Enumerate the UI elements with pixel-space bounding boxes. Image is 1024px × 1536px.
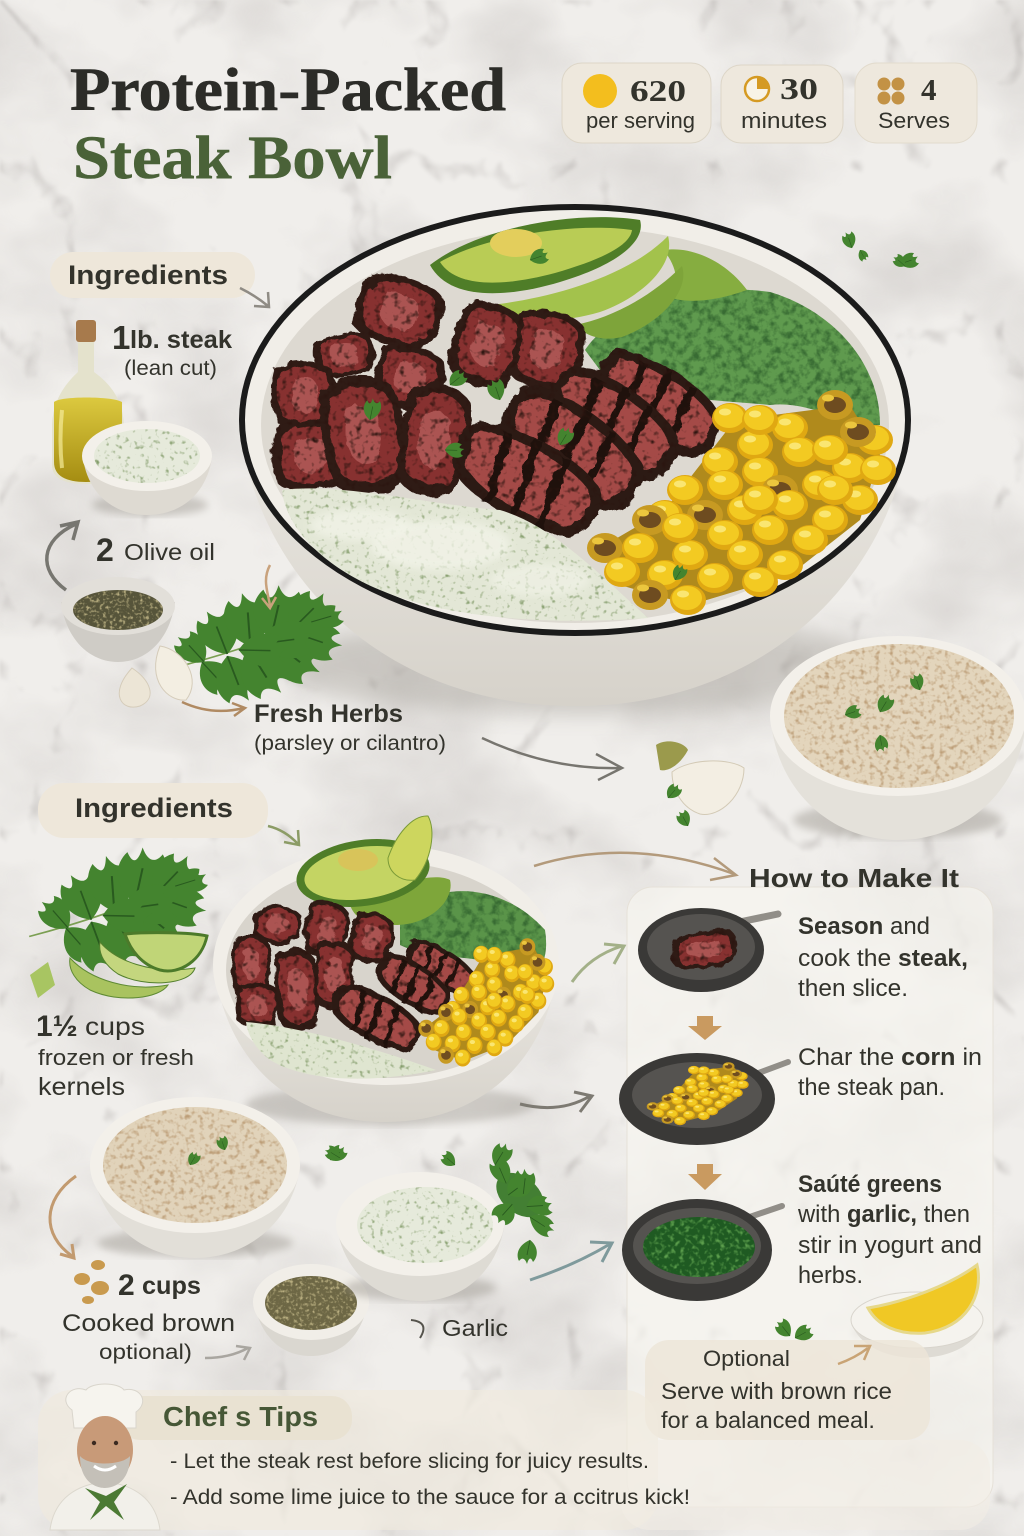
step 3 text: herbs.	[798, 1262, 863, 1289]
text: corn amount: frozen or fresh	[38, 1045, 194, 1070]
arrow: step 1 to 2	[688, 1016, 722, 1040]
ingredients heading 1: Ingredients	[68, 260, 228, 290]
step 3 text: Saúté greens	[798, 1171, 942, 1198]
step 3 pan	[622, 1199, 782, 1301]
herb sprig	[772, 1316, 816, 1346]
yogurt sauce bowl lower	[336, 1172, 504, 1301]
stat chip: calories: per serving	[586, 108, 695, 133]
arrows: around second bowl	[520, 944, 624, 1280]
icon: grains	[74, 1260, 109, 1304]
panel: how to make it	[619, 863, 993, 1507]
title	[70, 57, 506, 192]
ingredients heading 1	[50, 252, 255, 298]
parsley	[165, 584, 348, 710]
stat chip: serves	[855, 63, 977, 143]
arrow: to how to make it	[534, 853, 736, 880]
title: Steak Bowl	[73, 125, 392, 192]
ingredients heading 2	[38, 783, 268, 838]
panel: optional: Optional	[703, 1346, 790, 1371]
tip 2: - Add some lime juice to the sauce for a ccitrus kick!	[170, 1486, 690, 1509]
text: fresh herbs: Fresh Herbs	[254, 700, 403, 728]
text: steak amount: 1	[112, 319, 130, 356]
text: steak amount: lb. steak	[130, 326, 232, 354]
icon: olive oil bottle	[52, 320, 124, 484]
steak slices	[268, 267, 736, 552]
stat chip: time	[721, 65, 843, 143]
heading text: Chef s Tips	[163, 1401, 318, 1432]
stat chip: time: 30	[780, 71, 818, 106]
text: rice amount	[62, 1269, 235, 1364]
parsley and cucumber left	[29, 846, 212, 998]
sauce	[282, 488, 648, 621]
icon: yellow circle	[583, 74, 617, 108]
text: rice amount: optional)	[99, 1341, 192, 1364]
greens	[585, 289, 880, 425]
lemon dish	[851, 1265, 983, 1358]
panel: optional: for a balanced meal.	[661, 1407, 875, 1433]
step 2 text: Char the corn in	[798, 1044, 982, 1071]
text: steak amount	[112, 319, 232, 380]
text: corn amount: cups	[85, 1013, 145, 1041]
stat chip: calories	[562, 63, 711, 143]
arrow: small orange curve	[262, 565, 276, 608]
step 1 text	[798, 913, 968, 1002]
greens	[400, 891, 546, 972]
tip 1: - Let the steak rest before slicing for juicy results.	[170, 1450, 649, 1473]
spice bowl lower	[253, 1264, 369, 1356]
main steak bowl	[239, 204, 911, 715]
avocado slices	[430, 217, 747, 339]
text: olive oil amount: Olive oil	[124, 539, 215, 565]
text: olive oil amount	[96, 532, 215, 568]
chopped herbs	[323, 1140, 579, 1264]
brown rice bowl right	[770, 636, 1024, 840]
stat chip: time: minutes	[741, 108, 827, 133]
arrow: to lemon	[838, 1346, 870, 1364]
text: olive oil amount: 2	[96, 532, 114, 568]
icon: four dots	[878, 78, 904, 104]
arrow: small grey	[205, 1346, 250, 1360]
arrow: to small bowl	[268, 826, 299, 845]
garlic cloves	[119, 646, 192, 707]
arrow: to garlic	[482, 738, 622, 780]
text: corn amount	[36, 1010, 194, 1101]
herb garnish	[364, 246, 689, 583]
arrow: curved up	[47, 522, 78, 590]
step 1 pan	[638, 908, 778, 992]
step 3 text: stir in yogurt and	[798, 1232, 982, 1259]
steak slices	[232, 898, 483, 1060]
arrow: curved orange	[50, 1176, 76, 1258]
text: rice amount: cups	[142, 1272, 201, 1300]
text: rice amount: 2	[118, 1269, 135, 1302]
arrow: to bowl	[240, 288, 269, 307]
text: steak amount: (lean cut)	[124, 357, 217, 380]
avocado	[292, 816, 451, 925]
heading pill	[120, 1396, 352, 1440]
step 2 text	[798, 1044, 982, 1101]
stat chip: calories: 620	[630, 73, 686, 108]
title: Protein-Packed	[70, 57, 506, 124]
arrow: step 2 to 3	[688, 1164, 722, 1190]
text: fresh herbs	[254, 700, 446, 755]
ingredients heading 2: Ingredients	[75, 793, 233, 823]
arrow: to fresh herbs	[182, 702, 245, 716]
step 1 text: cook the steak,	[798, 945, 968, 972]
step 3 text: with garlic, then	[797, 1201, 970, 1228]
text: corn amount: kernels	[38, 1073, 125, 1101]
step 1 text: then slice.	[798, 975, 908, 1002]
icon: clock	[745, 77, 769, 101]
brown rice bowl lower	[90, 1097, 300, 1258]
garlic clove and olive right	[656, 741, 744, 829]
step 1 text: Season and	[798, 913, 930, 940]
corn	[418, 938, 554, 1067]
spice bowl	[61, 577, 175, 662]
small sauce bowl	[82, 421, 212, 516]
chef portrait	[50, 1384, 160, 1530]
text: garlic: Garlic	[442, 1315, 508, 1341]
step 2 pan	[619, 1053, 788, 1145]
scattered herbs top right	[839, 229, 922, 273]
step 3 text	[797, 1171, 982, 1289]
text: garlic	[411, 1315, 508, 1341]
step 2 text: the steak pan.	[798, 1074, 945, 1101]
text: fresh herbs: (parsley or cilantro)	[254, 732, 446, 755]
panel: chef's tips	[38, 1384, 990, 1530]
second steak bowl	[213, 816, 559, 1125]
panel: optional	[645, 1340, 930, 1440]
stat chip: serves: 4	[921, 72, 936, 107]
panel: optional: Serve with brown rice	[661, 1378, 892, 1404]
heading: How to Make It	[749, 863, 959, 893]
text: rice amount: Cooked brown	[62, 1310, 235, 1337]
sauce	[246, 1022, 436, 1079]
corn	[587, 390, 896, 615]
text: corn amount: 1½	[36, 1010, 78, 1043]
stat chip: serves: Serves	[878, 108, 950, 133]
